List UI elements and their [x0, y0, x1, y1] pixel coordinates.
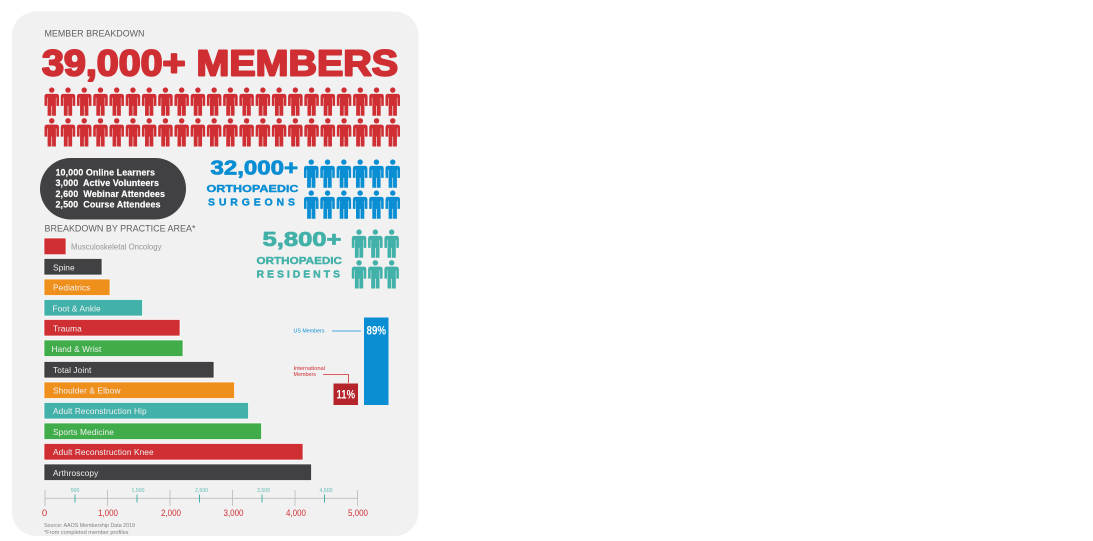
bar: spine [44, 258, 102, 275]
bar: pediatrics [44, 279, 110, 296]
bar: adult reconstruction hip: Adult Reconstruction Hip [53, 406, 147, 416]
chart axis: 500 [71, 488, 79, 494]
chart axis: 4,500 [320, 488, 333, 494]
bar chart: practice areas [44, 238, 312, 480]
panel: background card [12, 12, 418, 536]
heading: breakdown by practice area: BREAKDOWN BY PRACTICE AREA* [44, 224, 196, 234]
icons: blue surgeon pictograms [304, 159, 400, 219]
chart axis: 4,000 [286, 508, 306, 519]
bar: total joint: Total Joint [53, 365, 92, 375]
chart axis: 3,000 [224, 508, 244, 519]
source note: *From completed member profiles [44, 530, 129, 536]
chart: international members bar: Members [294, 372, 316, 378]
icons: red member pictogram rows [44, 87, 400, 146]
title: 39,000+ members: 39,000+ MEMBERS [42, 42, 398, 84]
bar: sports medicine: Sports Medicine [53, 427, 114, 437]
stat: 32,000+ orthopaedic surgeons: 32,000+ [210, 156, 298, 180]
chart: US members bar: 89% [367, 324, 386, 338]
chart: international members bar: 11% [337, 388, 355, 402]
chart: international members bar: International [294, 366, 325, 372]
stat: 5,800+ orthopaedic residents: 5,800+ [262, 228, 342, 251]
bar: hand and wrist [44, 340, 183, 356]
bar: adult reconstruction hip [44, 402, 248, 419]
stat: 32,000+ orthopaedic surgeons [206, 156, 299, 208]
heading: member breakdown: MEMBER BREAKDOWN [44, 28, 144, 38]
callout: engagement pill [40, 158, 186, 220]
bar: shoulder and elbow: Shoulder & Elbow [53, 386, 121, 396]
chart axis [42, 488, 368, 519]
bar: trauma: Trauma [53, 323, 82, 333]
stat: 32,000+ orthopaedic surgeons: SURGEONS [208, 196, 295, 208]
source note: Source: AAOS Membership Data 2019 [44, 523, 135, 529]
icons: teal resident pictograms [352, 229, 399, 288]
bar: spine: Spine [53, 262, 75, 272]
callout: engagement pill: 10,000 Online Learners [56, 167, 155, 177]
stat: 5,800+ orthopaedic residents: ORTHOPAEDIC [256, 255, 342, 267]
bar: trauma [44, 320, 180, 336]
stat: 5,800+ orthopaedic residents: RESIDENTS [256, 268, 340, 280]
chart axis: 5,000 [348, 508, 368, 519]
bar: arthroscopy: Arthroscopy [53, 468, 99, 478]
bar: arthroscopy [44, 464, 312, 480]
chart axis: 1,500 [132, 488, 145, 494]
stat: 32,000+ orthopaedic surgeons: ORTHOPAEDIC [206, 183, 299, 195]
bar: pediatrics: Pediatrics [53, 283, 90, 293]
callout: engagement pill: 2,500 Course Attendees [56, 200, 160, 210]
bar: musculoskeletal oncology [44, 238, 162, 255]
chart: international members bar [294, 366, 358, 405]
chart axis: 2,500 [195, 488, 208, 494]
bar: foot and ankle: Foot & Ankle [52, 303, 101, 313]
bar: total joint [44, 362, 214, 378]
chart: US members bar: US Members [294, 329, 325, 335]
bar: musculoskeletal oncology: Musculoskeletal Oncology [71, 242, 162, 252]
bar: foot and ankle [44, 300, 142, 316]
bar: sports medicine [44, 423, 262, 440]
chart axis: 3,500 [257, 488, 270, 494]
source note [44, 523, 135, 536]
chart axis: 1,000 [98, 508, 118, 519]
bar: adult reconstruction knee: Adult Reconstruction Knee [53, 447, 154, 457]
chart: US members bar [294, 318, 388, 405]
callout: engagement pill: 2,600 Webinar Attendees [56, 189, 165, 199]
bar: adult reconstruction knee [44, 444, 303, 460]
chart axis: 0 [42, 508, 47, 519]
chart axis: 2,000 [161, 508, 181, 519]
stat: 5,800+ orthopaedic residents [256, 228, 342, 280]
bar: hand and wrist: Hand & Wrist [52, 344, 102, 354]
bar: shoulder and elbow [44, 382, 234, 398]
callout: engagement pill: 3,000 Active Volunteers [56, 178, 159, 188]
